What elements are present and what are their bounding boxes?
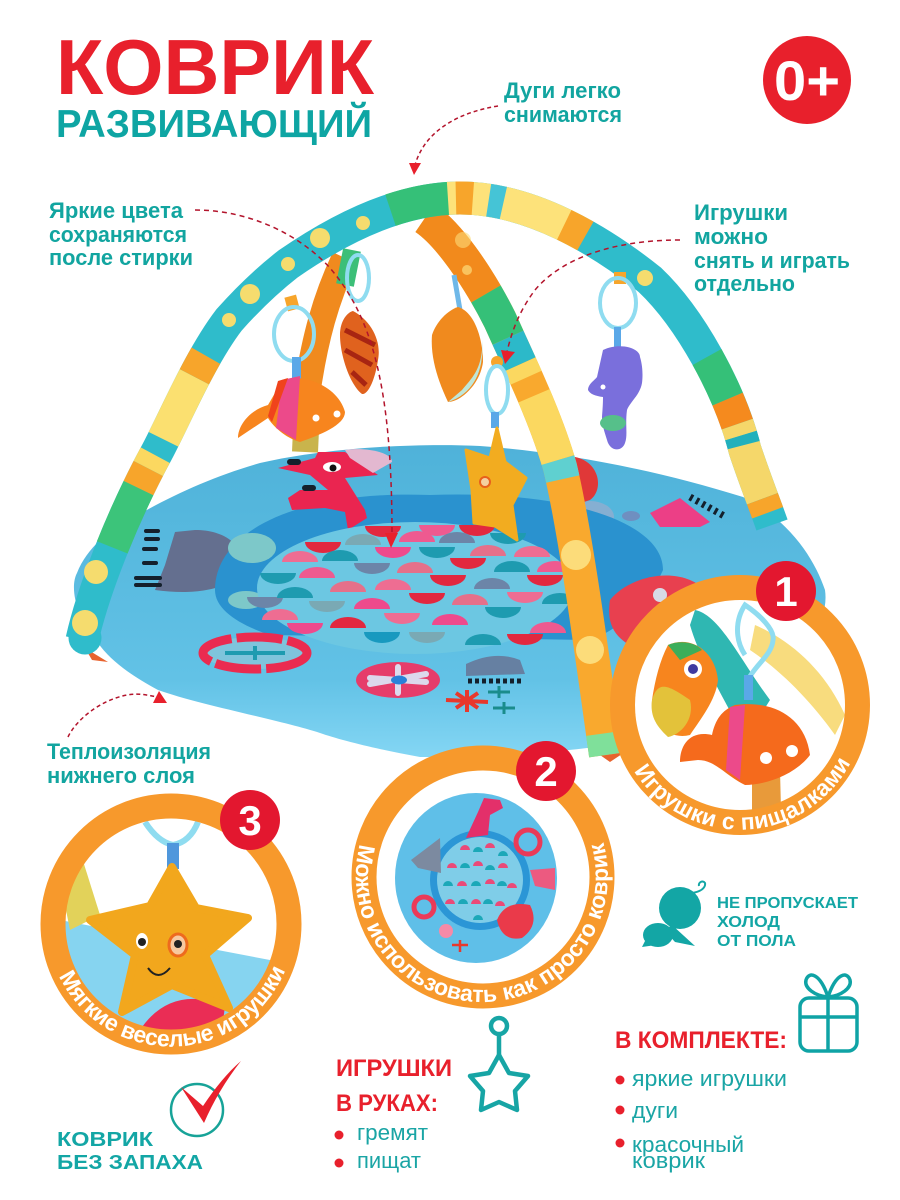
mat: centre pond	[257, 522, 573, 654]
note: bright colours	[49, 198, 193, 270]
note: arches detach: снимаются	[504, 102, 622, 127]
play mat	[74, 445, 826, 762]
arrow to mat edge	[68, 691, 167, 737]
circle 1 ring	[622, 588, 858, 822]
circle 2 ring	[364, 758, 602, 996]
icon: baby	[642, 882, 705, 947]
circle 1: toys with squeakers	[610, 561, 870, 835]
list: toys actions	[334, 1120, 428, 1173]
toy: clownfish with ring	[238, 295, 345, 442]
mat: flower disc	[203, 637, 307, 669]
note: blocks floor cold	[717, 895, 858, 950]
circle 2: use as a plain mat	[352, 741, 614, 1008]
heading: toys in hands	[336, 1055, 452, 1117]
icon: gift	[800, 975, 857, 1051]
badge 2	[516, 741, 576, 801]
note: bright colours: сохраняются	[49, 222, 187, 247]
age badge 0+	[763, 36, 851, 124]
title: КОВРИК	[56, 23, 374, 111]
toy: red fish	[340, 255, 379, 394]
mat: half-circle pattern	[247, 525, 578, 645]
toy: star with ring	[466, 356, 526, 540]
circle 3: soft toys	[40, 790, 302, 1054]
mat: small stars	[446, 690, 488, 712]
note: no smell	[57, 1129, 203, 1174]
mat: teal stars	[488, 686, 515, 714]
note: detachable toys: можно	[694, 224, 768, 249]
arrow to toy	[501, 240, 680, 364]
centre arch dots	[455, 232, 604, 664]
note: detachable toys	[694, 200, 850, 296]
heading: in the set: В КОМПЛЕКТЕ:	[615, 1027, 787, 1054]
note: bright colours: Яркие цвета	[49, 198, 184, 223]
list: toys actions: гремят	[357, 1120, 428, 1145]
centre arch	[425, 218, 606, 755]
note: bright colours: после стирки	[49, 245, 193, 270]
circle 2 mini mat	[364, 758, 602, 996]
age badge 0+: 0+	[774, 49, 840, 112]
heading: toys in hands: В РУКАХ:	[336, 1090, 438, 1117]
badge 3: 3	[238, 797, 262, 844]
subtitle: РАЗВИВАЮЩИЙ	[56, 101, 372, 146]
list: toys actions: пищат	[357, 1148, 421, 1173]
mat: red half disc	[575, 457, 598, 505]
note: detachable toys: снять и играть	[694, 248, 850, 273]
list: set contents: коврик	[632, 1148, 705, 1173]
mat: blue ring around pond	[215, 494, 663, 640]
note: detachable toys: отдельно	[694, 271, 795, 296]
mat: flower	[356, 662, 440, 698]
arrow to pond	[195, 210, 398, 548]
badge 1: 1	[774, 568, 798, 615]
circle 2 caption: Можно использовать как просто коврик	[356, 842, 613, 1002]
note: blocks floor cold: ОТ ПОЛА	[717, 933, 796, 950]
mat: left shell	[136, 530, 243, 592]
note: arches detach	[504, 78, 622, 127]
note: bottom layer insulation: Теплоизоляция	[47, 739, 211, 764]
list: set contents: яркие игрушки	[632, 1066, 787, 1091]
toy: orange fish	[432, 275, 483, 402]
mat: giraffe	[278, 449, 392, 530]
note: detachable toys: Игрушки	[694, 200, 788, 225]
mat: ring lobes	[228, 533, 276, 609]
circle 3 caption: Мягкие веселые игрушки	[59, 966, 285, 1047]
badge 2: 2	[534, 748, 558, 795]
note: bottom layer insulation	[47, 739, 211, 788]
badge 1	[756, 561, 816, 621]
front arch	[68, 198, 772, 654]
mat: elephant	[609, 576, 720, 650]
arch dots	[72, 216, 653, 636]
note: blocks floor cold: НЕ ПРОПУСКАЕТ	[717, 895, 858, 912]
mat: right shell	[650, 497, 726, 527]
circle 1 caption: Игрушки с пищалками	[634, 758, 850, 830]
badge 3	[220, 790, 280, 850]
list: set contents	[616, 1066, 787, 1173]
note: blocks floor cold: ХОЛОД	[717, 914, 781, 931]
list: set contents: красочный	[632, 1132, 744, 1157]
heading: toys in hands: ИГРУШКИ	[336, 1055, 452, 1082]
mat: gray lobes	[422, 496, 640, 533]
note: arches detach: Дуги легко	[504, 78, 621, 103]
circle 1 interior	[635, 600, 845, 810]
arrow to arch	[409, 106, 498, 175]
icon: star toy	[470, 1018, 528, 1110]
list: set contents: дуги	[632, 1098, 678, 1123]
circle 3 ring	[53, 806, 289, 1042]
icon: check mark	[171, 1061, 241, 1136]
note: bottom layer insulation: нижнего слоя	[47, 763, 195, 788]
toy: seahorse with ring	[588, 272, 642, 449]
circle 3 interior	[66, 821, 270, 1030]
note: no smell: КОВРИК	[57, 1129, 154, 1151]
back left arch	[305, 250, 352, 452]
note: no smell: БЕЗ ЗАПАХА	[57, 1152, 203, 1174]
mat: small shell	[466, 656, 525, 681]
